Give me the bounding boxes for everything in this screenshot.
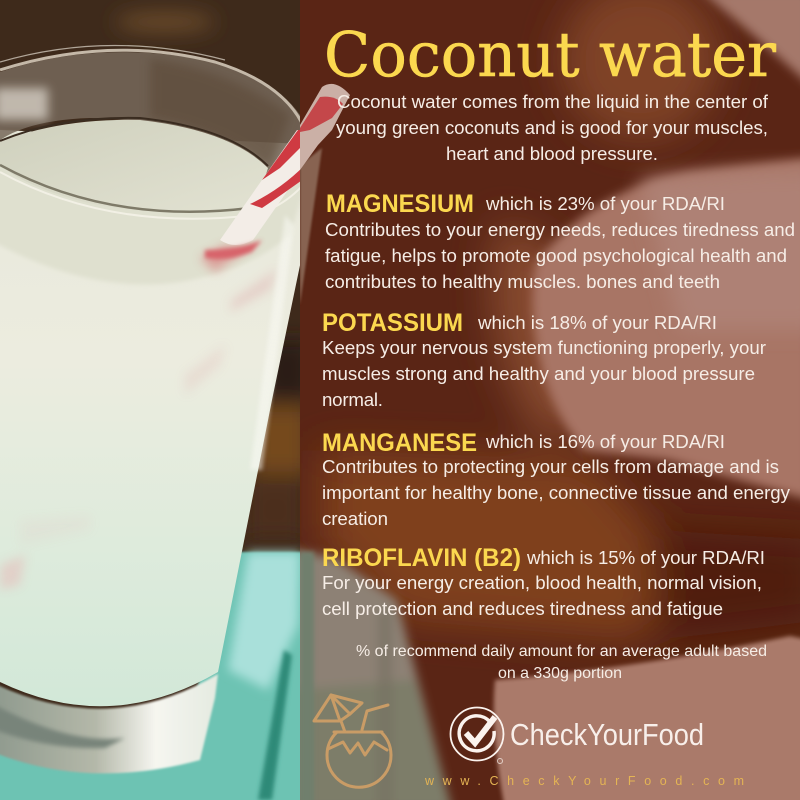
icon: check mark badge [450, 708, 504, 764]
section: riboflavin [322, 544, 765, 619]
section: potassium [322, 309, 766, 410]
glass base [0, 674, 218, 773]
section: potassium: which is 18% of your RDA/RI [477, 312, 717, 333]
section: potassium: normal. [322, 389, 383, 410]
logo: CheckYourFood [450, 708, 704, 764]
intro text: Coconut water comes from the liquid in the center of [337, 91, 769, 112]
section: riboflavin: cell protection and reduces tiredness and fatigue [322, 598, 723, 619]
section: manganese: MANGANESE [322, 429, 477, 457]
glass rim behind panel [300, 148, 322, 305]
section: riboflavin: RIBOFLAVIN (B2) [322, 544, 521, 572]
teal cloth [0, 552, 320, 800]
logo: CheckYourFood: CheckYourFood [510, 717, 704, 752]
footnote: % of recommend daily amount for an average adult based [356, 643, 767, 660]
website url: www.CheckYourFood.com [424, 774, 744, 788]
section: riboflavin: which is 15% of your RDA/RI [526, 547, 765, 568]
section: magnesium [325, 190, 795, 292]
straw tip [300, 84, 350, 170]
section: magnesium: contributes to healthy muscles. bones and teeth [325, 271, 720, 292]
section: magnesium: MAGNESIUM [326, 190, 474, 218]
glass body [0, 130, 325, 706]
upper empty glass [0, 52, 300, 174]
section: magnesium: which is 23% of your RDA/RI [485, 193, 725, 214]
section: manganese: Contributes to protecting your cells from damage and is [322, 456, 779, 477]
section: potassium: Keeps your nervous system functioning properly, your [322, 337, 766, 358]
footnote [356, 643, 767, 682]
section: potassium: POTASSIUM [322, 309, 463, 337]
panel: translucent brown text panel [290, 0, 800, 800]
section: manganese: important for healthy bone, connective tissue and energy [322, 482, 791, 503]
section: magnesium: fatigue, helps to promote good psychological health and [325, 245, 787, 266]
intro text: heart and blood pressure. [446, 143, 658, 164]
liquid surface [0, 120, 268, 190]
straw inside glass [205, 130, 330, 259]
section: magnesium: Contributes to your energy needs, reduces tiredness and [325, 219, 795, 240]
footnote: on a 330g portion [498, 665, 622, 682]
section: manganese: creation [322, 508, 388, 529]
intro text: young green coconuts and is good for your muscles, [336, 117, 768, 138]
photo: glass of coconut water [0, 0, 330, 800]
section: potassium: muscles strong and healthy and your blood pressure [322, 363, 755, 384]
icon: coconut drink [314, 695, 391, 787]
section: manganese: which is 16% of your RDA/RI [485, 431, 725, 452]
intro text [336, 91, 769, 164]
section: riboflavin: For your energy creation, blood health, normal vision, [322, 572, 762, 593]
section: manganese [322, 429, 791, 529]
title: Coconut water [324, 18, 776, 91]
